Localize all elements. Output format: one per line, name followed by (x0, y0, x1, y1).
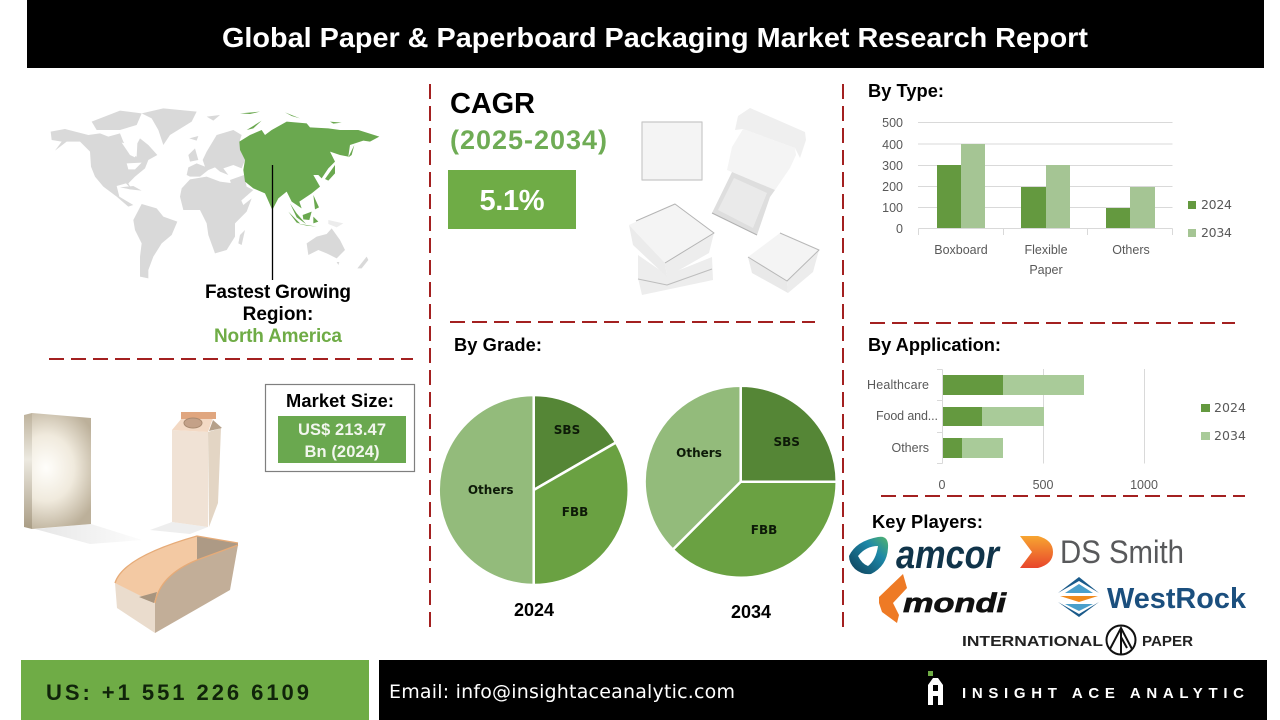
leader line (272, 165, 274, 280)
bar chart: by type: 400 (882, 138, 903, 152)
callout: market size (266, 384, 414, 472)
dividers (49, 84, 1245, 628)
legend: by application (1201, 400, 1246, 443)
logo: International Paper: INTERNATIONAL (962, 633, 1103, 650)
CAGR heading: CAGR (450, 88, 535, 120)
bar chart: by application: Others (891, 441, 929, 455)
CAGR period: (2025-2034) (450, 125, 607, 155)
bar chart: by application: 0 (939, 478, 946, 492)
footer: phone (21, 660, 369, 720)
bar chart: by application: 1000 (1130, 478, 1158, 492)
pie chart: 2034 grades: Others (676, 446, 722, 460)
footer: phone: US: +1 551 226 6109 (46, 680, 309, 705)
logo: WestRock (1058, 577, 1247, 617)
carton: open box (712, 108, 806, 235)
package: display tray (115, 536, 238, 633)
carton: flat lid (642, 122, 702, 180)
pie chart: 2024 grades: FBB (562, 505, 588, 519)
legend: by application: 2024 (1214, 400, 1246, 415)
bar chart: by application (867, 369, 1246, 492)
callout: market size: US$ 213.47 (298, 421, 386, 439)
package: cereal box (24, 413, 142, 544)
carton: stacked boxes (629, 204, 714, 295)
bar chart: by type: 300 (882, 159, 903, 173)
logo: mondi: mondi (903, 588, 1007, 618)
pie chart: 2034 grades: FBB (751, 523, 777, 537)
brand name: INSIGHT ACE ANALYTIC (962, 685, 1244, 702)
pie chart: 2034 grades: 2034 (731, 602, 771, 622)
logo: amcor (849, 533, 1001, 577)
bar chart: by type: 200 (882, 180, 903, 194)
bar chart: by type: Boxboard (934, 243, 988, 257)
bar chart: by type: 100 (882, 201, 903, 215)
heading: by type: By Type: (868, 80, 944, 101)
package: milk carton (150, 412, 222, 534)
panel: fastest growing region map (51, 108, 379, 347)
legend: by type (1188, 197, 1232, 240)
pie chart: 2024 grades (439, 395, 629, 620)
region label (205, 282, 351, 347)
heading: by grade: By Grade: (454, 334, 542, 355)
footer: contact and brand (379, 660, 1267, 720)
bar chart: by type: Others (1112, 243, 1150, 257)
pie chart: 2024 grades: 2024 (514, 600, 554, 620)
logo: International Paper: PAPER (1142, 633, 1193, 650)
email: Email: info@insightaceanalytic.com (389, 681, 735, 703)
logo: DS Smith: DS Smith (1060, 534, 1184, 570)
logo: WestRock: WestRock (1107, 583, 1247, 615)
title banner: Global Paper & Paperboard Packaging Market Research Report (222, 22, 1088, 53)
pie chart: 2024 grades: Others (468, 483, 514, 497)
pie chart: 2024 grades: SBS (554, 423, 580, 437)
callout: market size: Market Size: (286, 390, 394, 411)
world map (51, 108, 379, 278)
bar chart: by application: 500 (1033, 478, 1053, 492)
bar chart: by type: Flexible (1024, 243, 1068, 257)
panel: CAGR (448, 88, 607, 229)
bar chart: by type: 0 (896, 222, 903, 236)
region label: Fastest Growing (205, 282, 351, 303)
CAGR value (448, 170, 576, 229)
bar chart: by application: Food and... (876, 409, 938, 423)
logo: amcor: amcor (896, 533, 1001, 577)
legend: by type: 2024 (1201, 197, 1232, 212)
bar chart: by type (882, 116, 1232, 277)
pie chart: 2034 grades: SBS (773, 435, 800, 449)
region label: Region: (243, 304, 313, 325)
callout: market size: Bn (2024) (304, 443, 380, 461)
logo: mondi (879, 574, 1007, 623)
pie chart: 2034 grades (645, 386, 837, 622)
icon: Insight Ace logo (928, 671, 943, 705)
illustration: white cartons (629, 108, 819, 295)
panel: key players (849, 511, 1247, 654)
region label: North America (214, 326, 342, 347)
bar chart: by application: Healthcare (867, 378, 929, 392)
logo: International Paper (962, 626, 1193, 654)
CAGR value: 5.1% (480, 185, 545, 217)
heading: by application: By Application: (868, 334, 1001, 355)
legend: by type: 2034 (1201, 225, 1232, 240)
bar chart: by type: Paper (1029, 263, 1063, 277)
carton: closed box (748, 233, 819, 293)
illustration: paperboard packages (24, 412, 238, 633)
title banner (27, 0, 1264, 68)
heading: key players: Key Players: (872, 511, 983, 532)
bar chart: by type: 500 (882, 116, 903, 130)
legend: by application: 2034 (1214, 428, 1246, 443)
